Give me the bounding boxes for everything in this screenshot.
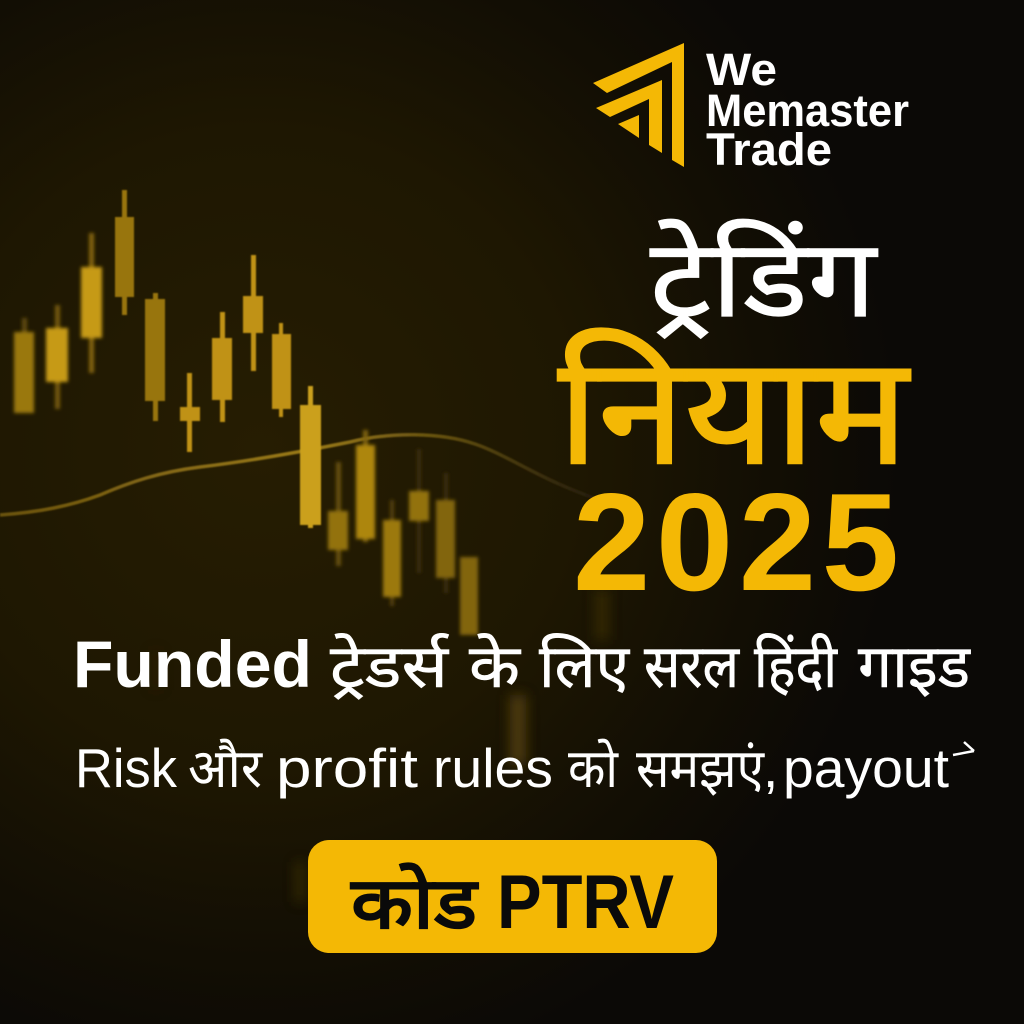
description: [75, 737, 974, 799]
logo: [593, 43, 909, 175]
moving average line: [0, 435, 600, 515]
subtitle: के: [469, 633, 521, 700]
code button: PTRV: [497, 860, 674, 945]
description: समझएं: [636, 739, 765, 799]
description: को: [568, 738, 619, 799]
title year: 2025: [573, 465, 899, 620]
logo wordmark: Trade: [706, 124, 832, 175]
title line 2: नियाम: [558, 327, 910, 495]
subtitle: सरल: [644, 633, 740, 700]
candlesticks: sharp group: [115, 190, 321, 528]
description: ,: [763, 737, 778, 799]
candlesticks: soft group: [14, 233, 478, 635]
subtitle: Funded: [73, 627, 312, 701]
icon: arrow logo mark: [593, 43, 684, 167]
logo wordmark: Memaster: [706, 85, 909, 136]
subtitle: ट्रेडर्स: [330, 633, 450, 700]
code button: [308, 840, 717, 953]
logo wordmark: [706, 44, 909, 175]
faint background candles: [150, 590, 609, 902]
truncated glyph mark: [953, 742, 974, 755]
subtitle: हिंदी: [754, 633, 838, 700]
code button: कोड: [349, 862, 480, 944]
subtitle: [73, 627, 971, 701]
description: Risk: [75, 737, 177, 799]
description: rules: [433, 737, 553, 799]
description: payout: [783, 737, 949, 799]
description: और: [188, 738, 263, 799]
title line 1: ट्रेडिंग: [650, 218, 878, 339]
description: profit: [276, 737, 418, 799]
subtitle: गाइड: [858, 633, 971, 700]
logo wordmark: We: [706, 44, 777, 95]
subtitle: लिए: [539, 633, 631, 700]
